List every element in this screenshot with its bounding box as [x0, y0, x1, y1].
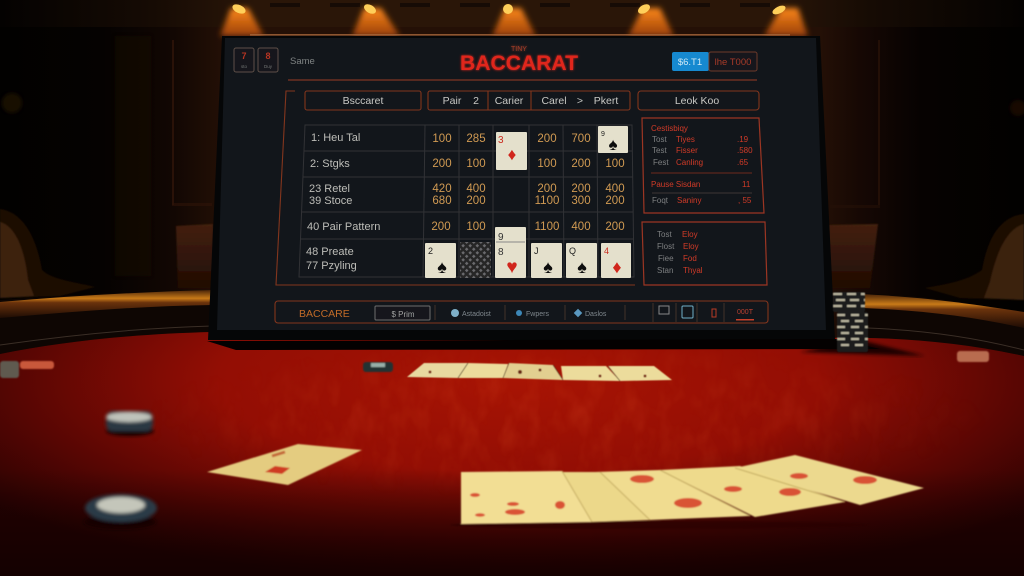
card: two of spades: ♠ [437, 257, 447, 277]
room background [0, 0, 1024, 345]
title: BACCARAT [460, 52, 578, 75]
side panel: statistics: .65 [737, 158, 749, 167]
side panel: statistics: .580 [737, 146, 753, 155]
red felt table [0, 330, 1024, 576]
results grid: 100 [605, 158, 625, 170]
results grid: 200 [605, 221, 625, 233]
card: nine of hearts: ♥ [506, 257, 518, 278]
toolbar tabs: Daslos [585, 311, 607, 318]
bottom toolbar: $ Prim [391, 310, 415, 319]
row labels: 1: Heu Tal [311, 132, 360, 144]
chip pile mid [106, 411, 154, 436]
card: spade top right: 9 [601, 131, 605, 138]
score boxes: Duy [264, 64, 273, 69]
results grid: 200 [571, 183, 591, 195]
side panel: legend [642, 222, 767, 285]
results grid: 39 Stoce [309, 195, 352, 207]
monitor top glow [250, 34, 790, 36]
monitor [207, 34, 880, 350]
header tabs: Bsccaret [343, 95, 383, 107]
header tabs: Pair [443, 95, 462, 107]
toolbar tabs [451, 309, 607, 318]
toolbar icons [659, 306, 754, 320]
side panel: statistics: Fest [653, 158, 669, 167]
results grid: 23 Retel [309, 183, 350, 195]
card: face down [460, 242, 491, 278]
results grid: 200 [537, 183, 557, 195]
card: queen of spades: ♠ [577, 257, 587, 277]
title: TINY [511, 46, 527, 53]
header tabs: Carel [541, 95, 567, 107]
results grid: 420 [432, 183, 452, 195]
card: four of diamonds [601, 243, 631, 278]
side tab: Leok Koo [675, 95, 719, 107]
main table panel [276, 91, 635, 285]
results grid: 77 Pzyling [306, 260, 357, 272]
card: three of diamonds: 3 [498, 135, 504, 146]
bottom toolbar: BACCARE [299, 308, 350, 320]
side panel: statistics: Tost [652, 135, 667, 144]
card: jack of spades: ♠ [543, 257, 553, 277]
lone card on felt [207, 444, 362, 485]
ceiling [0, 0, 1024, 27]
side tab [638, 91, 759, 110]
side panel: legend: Fod [683, 254, 697, 263]
table rim [0, 290, 1024, 356]
results grid: 700 [571, 133, 591, 145]
side panel: statistics: .19 [737, 135, 749, 144]
score boxes [234, 48, 278, 72]
score boxes: sto [241, 64, 247, 69]
monitor shadow [800, 340, 925, 356]
results grid: 400 [571, 221, 591, 233]
side panel: statistics: Fisser [676, 146, 698, 155]
side panel: legend: Stan [657, 266, 673, 275]
side panel: statistics: Test [652, 146, 667, 155]
score boxes: 7 [241, 51, 247, 61]
results grid: 100 [537, 158, 557, 170]
results grid: 100 [466, 221, 486, 233]
card: three of diamonds: ♦ [508, 145, 517, 164]
results grid: 300 [571, 195, 591, 207]
side panel: legend: Thyal [683, 266, 703, 275]
card: queen of spades: Q [569, 246, 576, 256]
toolbar icons: 000T [737, 309, 754, 316]
game label: Same [290, 56, 315, 67]
results grid: 200 [431, 221, 451, 233]
side panel: legend: Eloy [683, 242, 699, 251]
distant cards row [407, 363, 672, 381]
side panel: legend: Tost [657, 230, 672, 239]
header tabs: 2 [473, 95, 479, 107]
card: jack of spades [531, 243, 562, 278]
balance buttons [672, 52, 757, 71]
card: nine of hearts: 9 [498, 232, 504, 243]
distant chips [0, 351, 989, 378]
results grid: 200 [466, 195, 486, 207]
side panel: statistics: Pause Sisdan [651, 180, 700, 189]
blurred chips [84, 411, 157, 529]
toolbar tabs: Fwpers [526, 311, 549, 318]
ceiling lights [220, 2, 808, 36]
header tabs: > [577, 95, 583, 107]
score boxes: 8 [265, 51, 271, 61]
monitor screen [217, 38, 826, 330]
side panel: statistics: Saniny [677, 196, 701, 205]
results grid: 1100 [535, 221, 559, 233]
card: spade top right: ♠ [608, 135, 618, 154]
header tabs [305, 91, 630, 110]
side panel: legend: Fiee [658, 254, 674, 263]
side panel: statistics: Tiyes [676, 135, 695, 144]
results grid: 1100 [535, 195, 559, 207]
results grid: 200 [605, 195, 625, 207]
results grid [299, 125, 634, 277]
results grid: 285 [466, 133, 486, 145]
bottom toolbar [275, 301, 768, 323]
fanned cards foreground [450, 455, 924, 529]
card: three of diamonds [496, 132, 527, 170]
results grid: 680 [432, 195, 452, 207]
card: two of spades [425, 243, 456, 278]
results grid: 400 [605, 183, 625, 195]
row values: 100 [432, 133, 452, 145]
chairs [0, 209, 1024, 300]
toolbar tabs: Astadoist [462, 311, 491, 318]
chip stack by monitor [833, 292, 868, 352]
side panel: statistics: Cestisbiqy [651, 124, 688, 133]
monitor interface [234, 46, 768, 323]
results grid: 40 Pair Pattern [307, 221, 380, 233]
balance buttons: lhe T000 [715, 57, 751, 68]
side panel: legend: Eloy [682, 230, 698, 239]
results grid: 2: Stgks [310, 158, 350, 170]
monitor bezel [208, 36, 835, 340]
results grid: 48 Preate [306, 246, 354, 258]
side panel: legend: Flost [657, 242, 675, 251]
results grid: 200 [432, 158, 452, 170]
header tabs: Pkert [594, 95, 618, 107]
header tabs: Carier [495, 95, 524, 107]
card: queen of spades [566, 243, 597, 278]
balance buttons: $6.T1 [678, 57, 702, 68]
side panel: statistics: Foqt [652, 196, 669, 205]
side panel: statistics [642, 118, 764, 213]
results grid: 200 [571, 158, 591, 170]
side panel: statistics: 11 [742, 180, 751, 189]
card: two of spades: 2 [428, 246, 433, 256]
card: nine of hearts: 8 [498, 247, 504, 258]
chip pile front [84, 494, 157, 529]
card: four of diamonds: ♦ [612, 257, 622, 277]
results grid: 100 [466, 158, 486, 170]
results grid: 200 [537, 133, 557, 145]
card: four of diamonds: 4 [604, 246, 609, 256]
results grid: 400 [466, 183, 486, 195]
card: jack of spades: J [534, 246, 538, 256]
card: spade top right [598, 126, 628, 154]
side panel: statistics: , 55 [738, 196, 752, 205]
side panel: statistics: Canling [676, 158, 703, 167]
card: nine of hearts [495, 227, 526, 278]
table cards [425, 126, 631, 278]
